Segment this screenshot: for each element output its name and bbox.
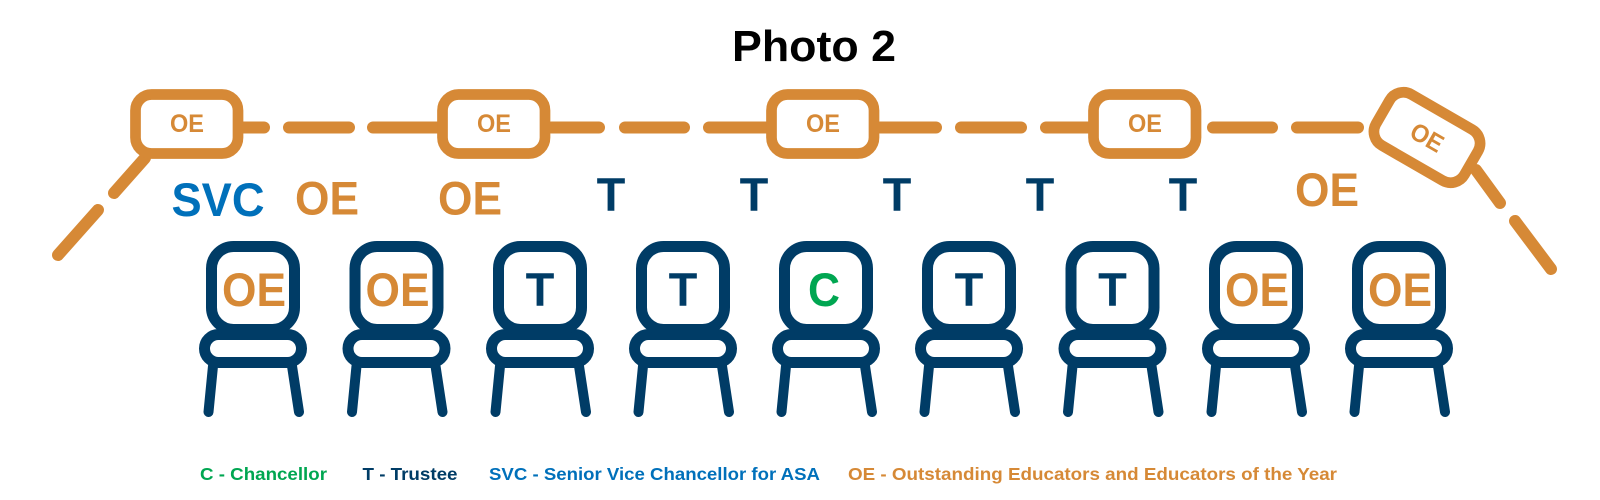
chair 4: T (634, 246, 732, 412)
standing position: OE box 2 (442, 94, 545, 154)
standing row labels: OE (1295, 163, 1359, 216)
standing row labels: T (740, 168, 769, 221)
chair 5: C (778, 246, 874, 412)
standing row labels: T (597, 168, 626, 221)
chair 4: T: T (669, 263, 698, 316)
chair 7: T (1064, 246, 1161, 412)
standing row labels (172, 163, 1359, 226)
chair 2: OE (348, 246, 445, 412)
standing position: rotated OE box 5: OE (1405, 117, 1448, 159)
legend: T - Trustee (362, 464, 458, 484)
legend: OE - Outstanding Educators and Educators of the Year (848, 464, 1337, 484)
standing position: OE box 2: OE (477, 110, 511, 138)
chair 8: OE: OE (1225, 263, 1289, 316)
chair 5: C: C (808, 263, 840, 316)
standing position: OE box 3: OE (806, 110, 840, 138)
standing row labels: T (883, 168, 912, 221)
standing position: rotated OE box 5 (1368, 86, 1486, 189)
standing row labels: SVC (172, 173, 264, 226)
legend: C - Chancellor (200, 464, 327, 484)
legend (200, 464, 1337, 484)
dashed arc line (58, 128, 1551, 269)
standing row labels: T (1026, 168, 1055, 221)
standing position: OE box 1: OE (170, 110, 204, 138)
standing position: OE box 4: OE (1128, 110, 1162, 138)
chair 9: OE: OE (1368, 263, 1432, 316)
chair 3: T (492, 246, 588, 412)
standing position: OE box 3 (772, 94, 874, 154)
chair 1: OE: OE (222, 263, 286, 316)
chair 7: T: T (1098, 263, 1127, 316)
standing position: OE box 4 (1094, 94, 1196, 154)
standing row labels: T (1169, 168, 1198, 221)
chair 6: T (920, 246, 1018, 412)
chair 3: T: T (526, 263, 555, 316)
standing position: OE box 1 (136, 94, 238, 154)
chair 8: OE (1208, 246, 1304, 412)
chair 6: T: T (955, 263, 984, 316)
chair 2: OE: OE (366, 263, 430, 316)
standing row labels: OE (295, 172, 359, 224)
chair 1: OE (204, 246, 302, 412)
chair 9: OE (1350, 246, 1448, 412)
title: Photo 2 (732, 22, 896, 71)
legend: SVC - Senior Vice Chancellor for ASA (489, 464, 820, 484)
standing row labels: OE (438, 172, 502, 224)
